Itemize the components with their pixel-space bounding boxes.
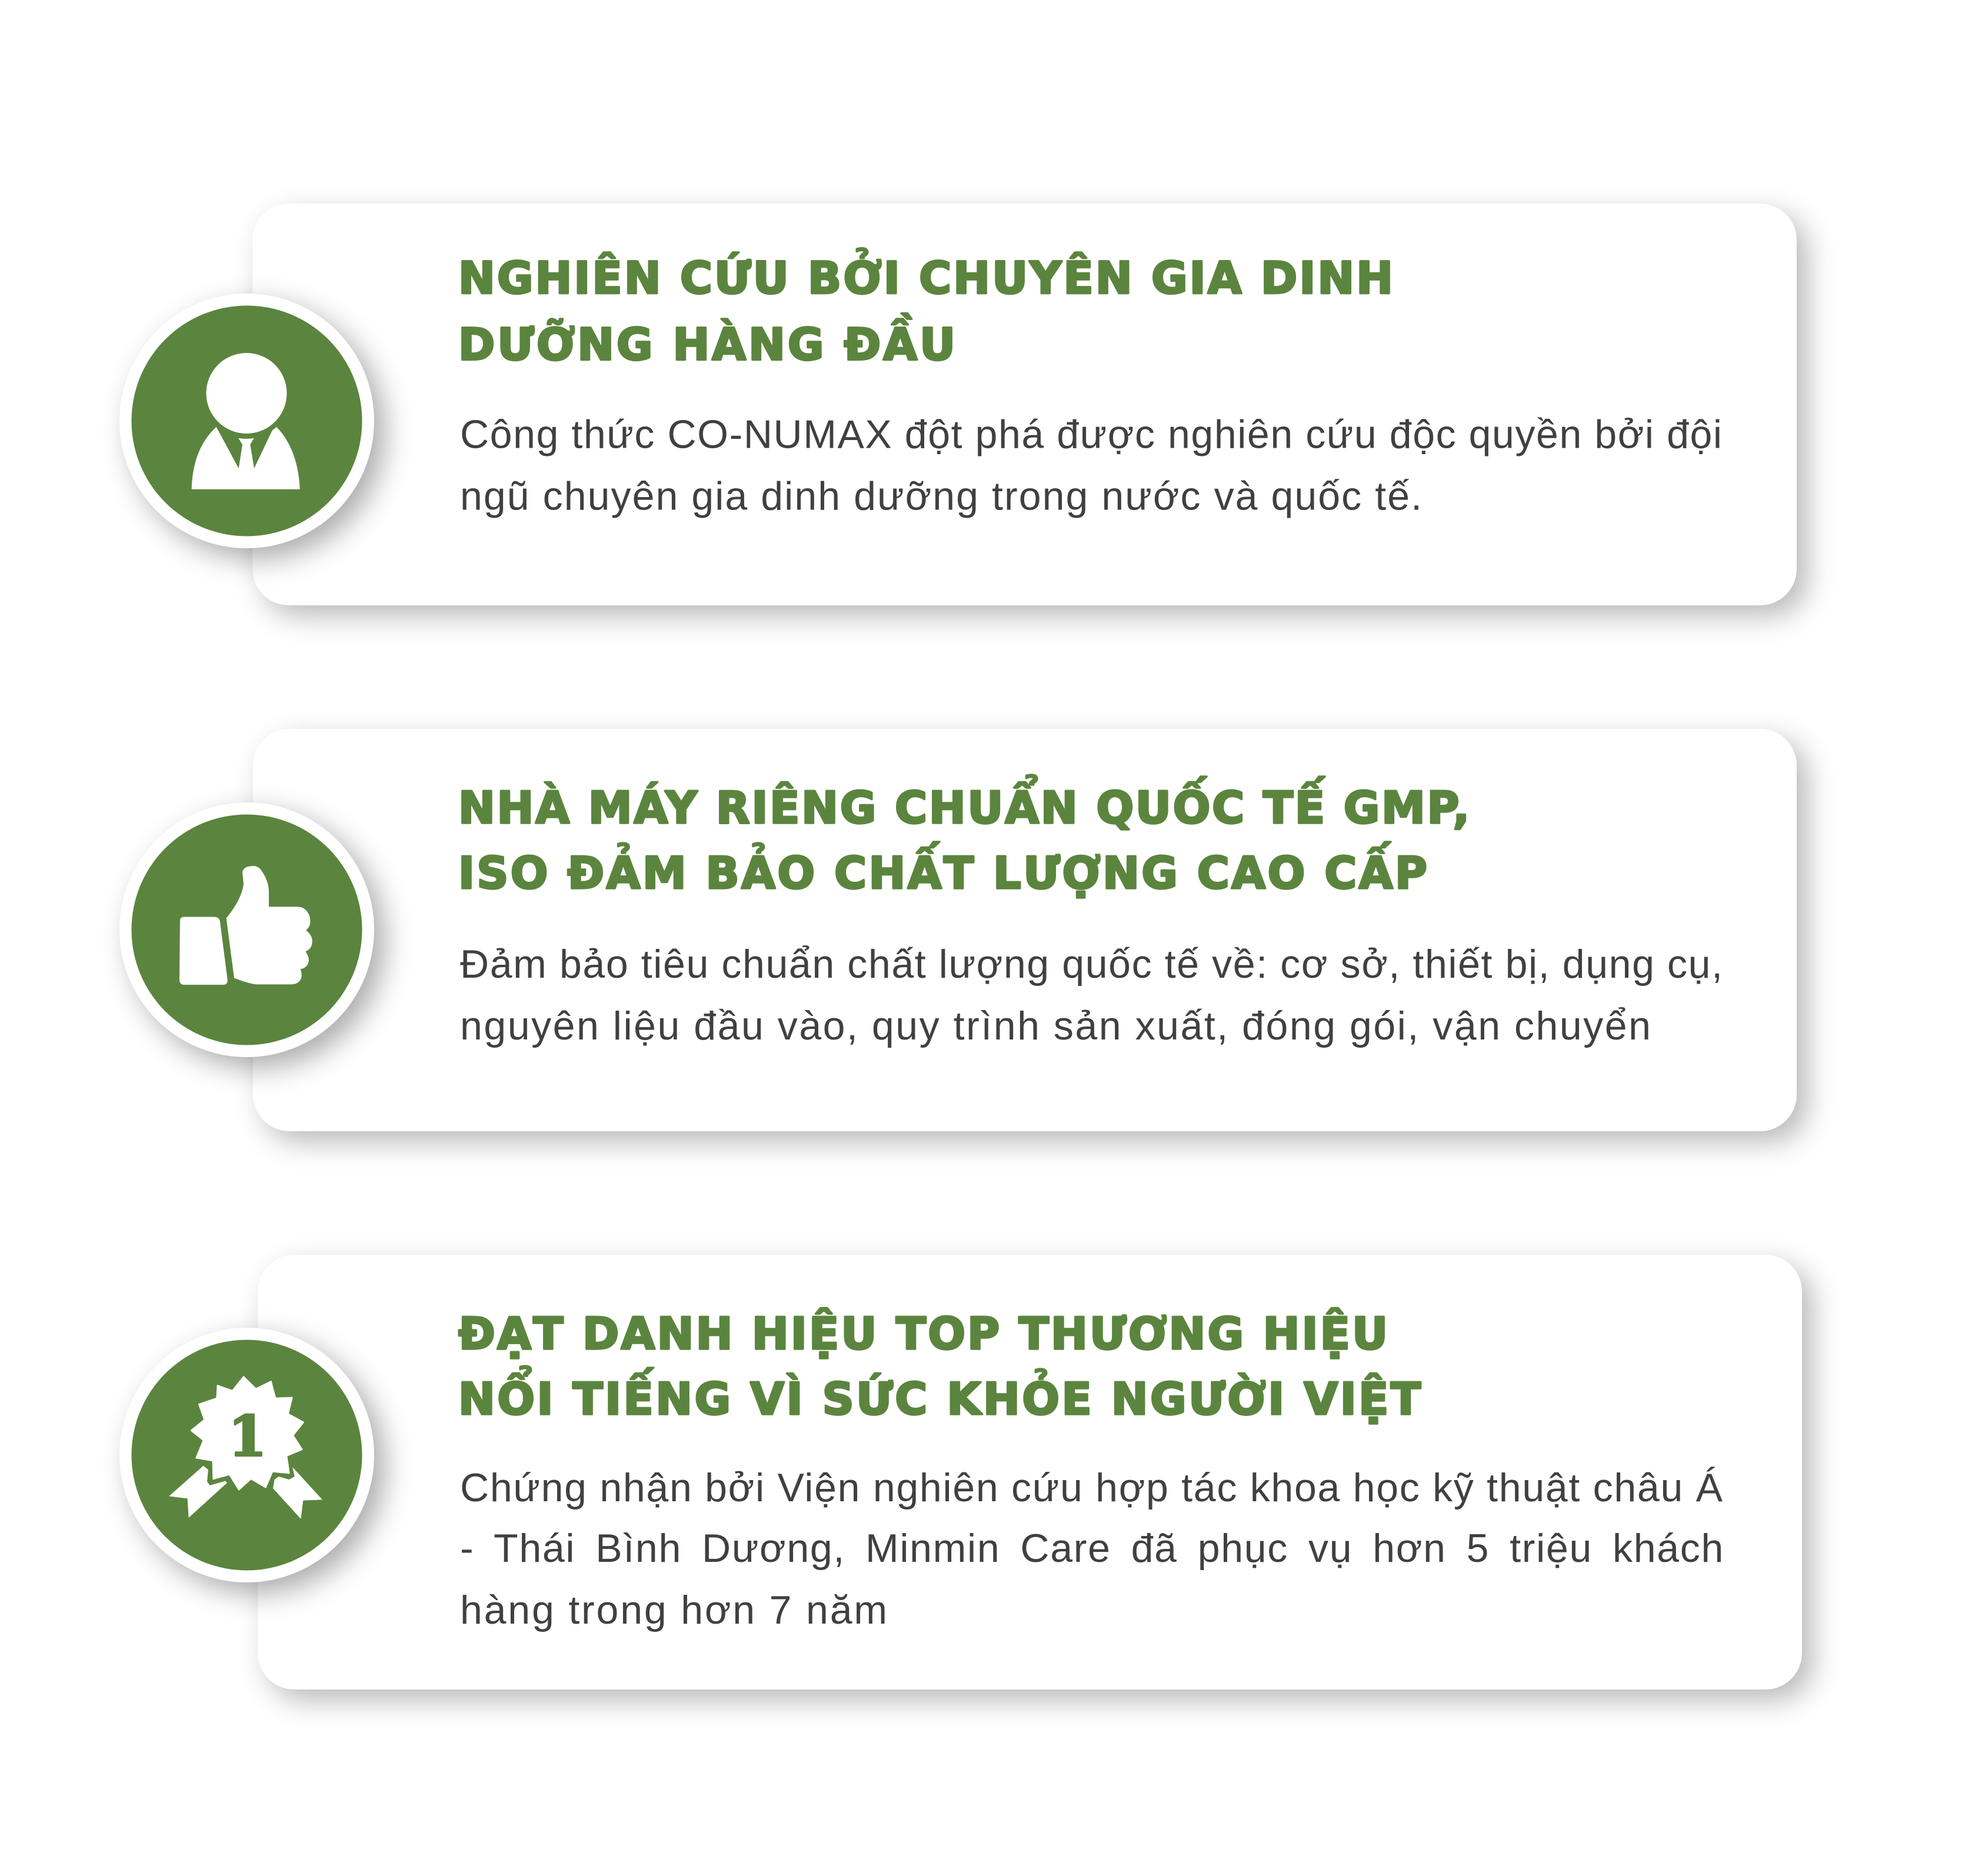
card background bbox=[252, 204, 1797, 605]
panel: GMP ISO factory bbox=[114, 724, 1823, 1158]
heading: top brand award bbox=[458, 1307, 1421, 1425]
heading: top brand award: NỔI TIẾNG VÌ SỨC KHỎE NGƯỜI VIỆT bbox=[458, 1366, 1421, 1425]
icon: thumbs up badge bbox=[119, 802, 374, 1057]
icon: number one medal badge bbox=[119, 1328, 374, 1582]
icon: number one medal badge: 1 bbox=[228, 1404, 267, 1469]
text: award description: Chứng nhận bởi Viện nghiên cứu hợp tác khoa học kỹ thuật châu Á bbox=[460, 1465, 1723, 1510]
heading: research by nutrition experts: NGHIÊN CỨU BỞI CHUYÊN GIA DINH bbox=[458, 248, 1393, 304]
text: award description: - Thái Bình Dương, Minmin Care đã phục vụ hơn 5 triệu khách bbox=[460, 1526, 1724, 1571]
text: factory description: nguyên liệu đầu vào, quy trình sản xuất, đóng gói, vận chuyển bbox=[460, 1004, 1651, 1048]
text: factory description: Đảm bảo tiêu chuẩn chất lượng quốc tế về: cơ sở, thiết bị, dụng cụ, bbox=[460, 942, 1723, 987]
icon: person in suit badge bbox=[119, 294, 374, 548]
text: research description bbox=[460, 412, 1722, 519]
card background bbox=[253, 729, 1797, 1131]
heading: GMP ISO factory: ISO ĐẢM BẢO CHẤT LƯỢNG CAO CẤP bbox=[458, 841, 1427, 899]
text: factory description bbox=[460, 942, 1723, 1048]
card background bbox=[258, 1255, 1802, 1690]
panel: research by nutrition experts bbox=[114, 198, 1823, 632]
heading: GMP ISO factory: NHÀ MÁY RIÊNG CHUẨN QUỐC TẾ GMP, bbox=[458, 775, 1470, 834]
text: award description bbox=[460, 1465, 1724, 1632]
heading: GMP ISO factory bbox=[458, 774, 1470, 899]
panel: top brand award bbox=[114, 1249, 1828, 1716]
text: research description: ngũ chuyên gia dinh dưỡng trong nước và quốc tế. bbox=[460, 474, 1422, 519]
heading: research by nutrition experts: DƯỠNG HÀNG ĐẦU bbox=[458, 314, 955, 371]
text: research description: Công thức CO-NUMAX đột phá được nghiên cứu độc quyền bởi đội bbox=[460, 412, 1722, 457]
heading: research by nutrition experts bbox=[458, 247, 1393, 371]
text: award description: hàng trong hơn 7 năm bbox=[460, 1588, 887, 1632]
heading: top brand award: ĐẠT DANH HIỆU TOP THƯƠNG HIỆU bbox=[458, 1308, 1388, 1359]
